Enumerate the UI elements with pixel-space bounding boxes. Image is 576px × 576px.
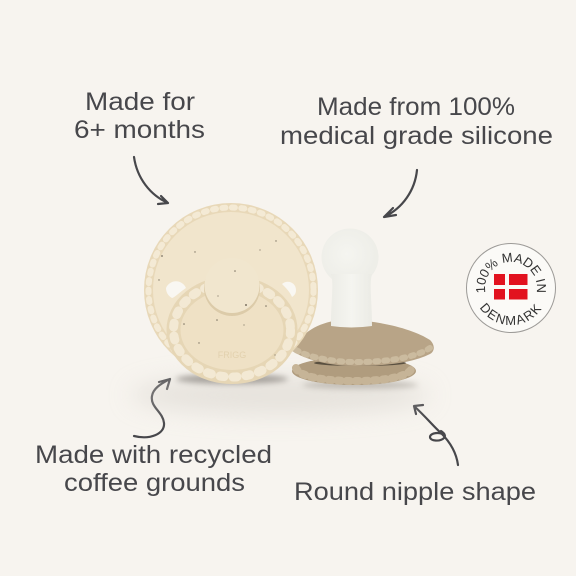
- text: made with recycled coffee grounds: [35, 441, 272, 497]
- text: made from 100% medical grade silicone: medical grade silicone: [280, 122, 553, 150]
- arrow: from recycled text: [134, 379, 170, 437]
- speckles: [158, 240, 277, 356]
- pacifier: side view: [291, 228, 434, 385]
- lower rope ring: [292, 357, 416, 385]
- arrow: from round nipple text: [414, 405, 458, 465]
- dark gap: [314, 360, 406, 366]
- vent hole right: [282, 282, 296, 297]
- button: [204, 258, 260, 316]
- lower inner shade: [180, 290, 284, 374]
- text: made for 6+ months: [74, 88, 205, 144]
- Danish flag: [494, 274, 528, 300]
- text: made with recycled coffee grounds: Made with recycled: [35, 441, 272, 469]
- brand mark: FRIGG: [218, 350, 246, 360]
- shield disk: [291, 320, 434, 366]
- outer rope rim: [148, 208, 314, 372]
- nipple: [322, 228, 378, 328]
- badge bottom text: DENMARK: [480, 302, 542, 325]
- text: round nipple shape: Round nipple shape: [294, 478, 536, 506]
- text: made for 6+ months: 6+ months: [74, 116, 205, 144]
- text: made from 100% medical grade silicone: Made from 100%: [317, 93, 515, 121]
- shield: [144, 203, 318, 377]
- badge: 100% made in Denmark: [466, 243, 556, 333]
- rope handle ring: [174, 283, 290, 377]
- arrow: to nipple: [384, 170, 417, 217]
- arrow: to front of pacifier: [134, 157, 168, 204]
- pacifier: front view: [144, 203, 318, 377]
- text: made from 100% medical grade silicone: [280, 93, 553, 150]
- text: made for 6+ months: Made for: [85, 88, 195, 116]
- badge top text: 100% MADE IN: [476, 252, 546, 292]
- text: made with recycled coffee grounds: coffee grounds: [64, 469, 245, 497]
- vent hole left: [166, 281, 186, 298]
- product shadow: [130, 374, 430, 415]
